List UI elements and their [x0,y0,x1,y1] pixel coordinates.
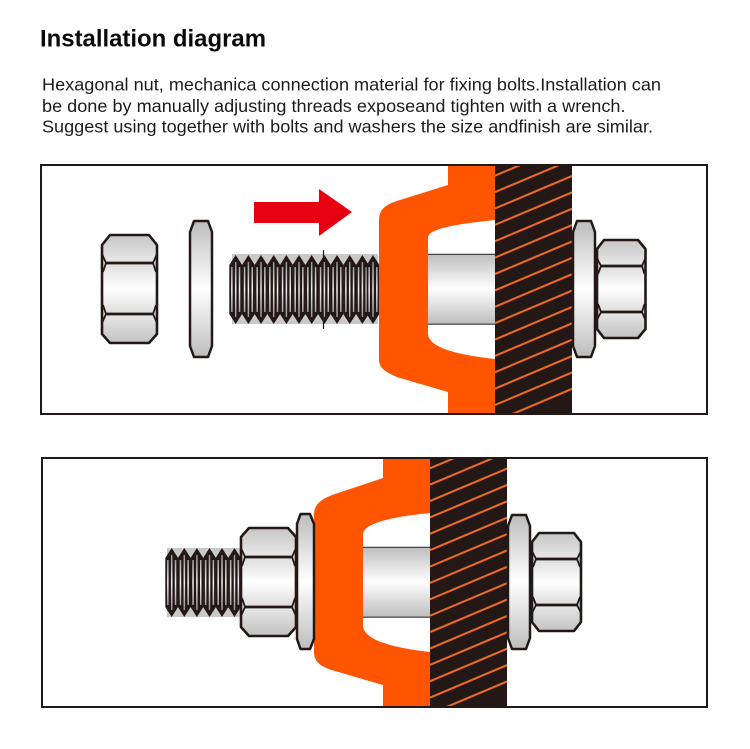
icon: tightened washer [297,514,314,649]
threaded bolt shank [229,250,379,329]
description text: Suggest using together with bolts and washers the size andfinish are similar. [42,117,653,137]
icon: rear washer [508,515,530,649]
orange bracket [379,165,495,414]
bolt shaft through bracket [428,254,495,324]
panel: after installation [42,436,707,714]
icon: rear hex nut [532,533,581,631]
orange bracket [314,458,430,707]
description text [42,75,661,137]
hatched wall [430,459,507,706]
arrow: insertion direction [254,189,352,236]
icon: tightened hex nut [241,528,296,636]
description text: be done by manually adjusting threads exposeand tighten with a wrench. [42,96,626,116]
icon: rear hex nut [597,240,646,338]
hatched wall [495,166,572,413]
bolt shaft through bracket [363,547,430,617]
threaded bolt end [165,548,242,617]
icon: loose washer [190,221,212,357]
panel: before installation [41,143,707,421]
title: Installation diagram [40,26,266,53]
icon: loose hex nut [102,235,157,343]
description text: Hexagonal nut, mechanica connection material for fixing bolts.Installation can [42,75,661,95]
icon: rear washer [573,221,595,357]
